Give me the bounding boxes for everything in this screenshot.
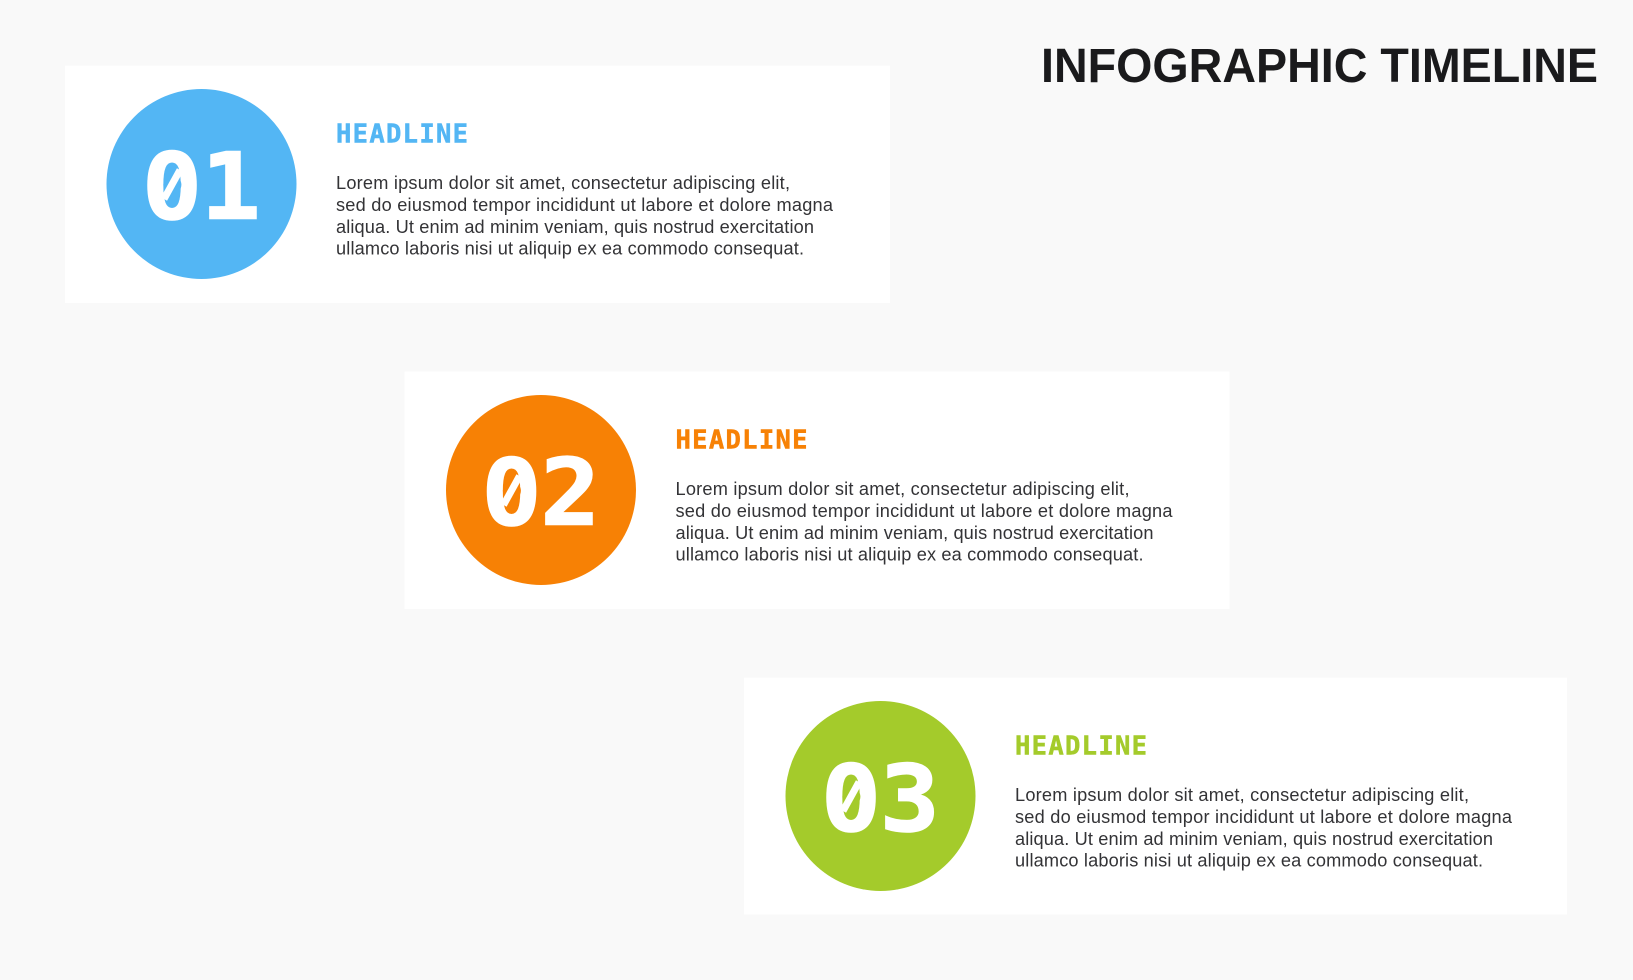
body text 01: [336, 173, 834, 259]
panel: step 03: [744, 678, 1567, 914]
body text 01: sed do eiusmod tempor incididunt ut labore et dolore magna: [336, 195, 834, 215]
headline 03: HEADLINE: [1015, 732, 1147, 762]
body text 02: aliqua. Ut enim ad minim veniam, quis nostrud exercitation: [676, 523, 1154, 543]
headline 01: HEADLINE: [336, 120, 468, 150]
panel: step 01: [65, 66, 890, 303]
body text 02: sed do eiusmod tempor incididunt ut labore et dolore magna: [676, 501, 1173, 521]
number badge 01: 01: [142, 133, 261, 241]
number badge 02: 02: [482, 439, 600, 547]
number badge 03: 03: [821, 745, 940, 853]
title: INFOGRAPHIC TIMELINE: [1041, 39, 1598, 93]
body text 02: ullamco laboris nisi ut aliquip ex ea commodo consequat.: [676, 545, 1144, 565]
number badge 03: [786, 701, 976, 891]
headline 02: HEADLINE: [676, 426, 808, 456]
body text 03: Lorem ipsum dolor sit amet, consectetur adipiscing elit,: [1015, 785, 1469, 805]
body text 02: Lorem ipsum dolor sit amet, consectetur adipiscing elit,: [676, 479, 1130, 499]
number badge 02: [446, 395, 636, 585]
body text 01: ullamco laboris nisi ut aliquip ex ea commodo consequat.: [336, 239, 804, 259]
body text 03: ullamco laboris nisi ut aliquip ex ea commodo consequat.: [1015, 851, 1483, 871]
body text 03: sed do eiusmod tempor incididunt ut labore et dolore magna: [1015, 807, 1513, 827]
panel: step 02: [404, 372, 1230, 609]
body text 02: [676, 479, 1173, 565]
body text 01: aliqua. Ut enim ad minim veniam, quis nostrud exercitation: [336, 217, 814, 237]
number badge 01: [106, 89, 296, 279]
body text 03: [1015, 785, 1513, 871]
body text 03: aliqua. Ut enim ad minim veniam, quis nostrud exercitation: [1015, 829, 1493, 849]
body text 01: Lorem ipsum dolor sit amet, consectetur adipiscing elit,: [336, 173, 790, 193]
